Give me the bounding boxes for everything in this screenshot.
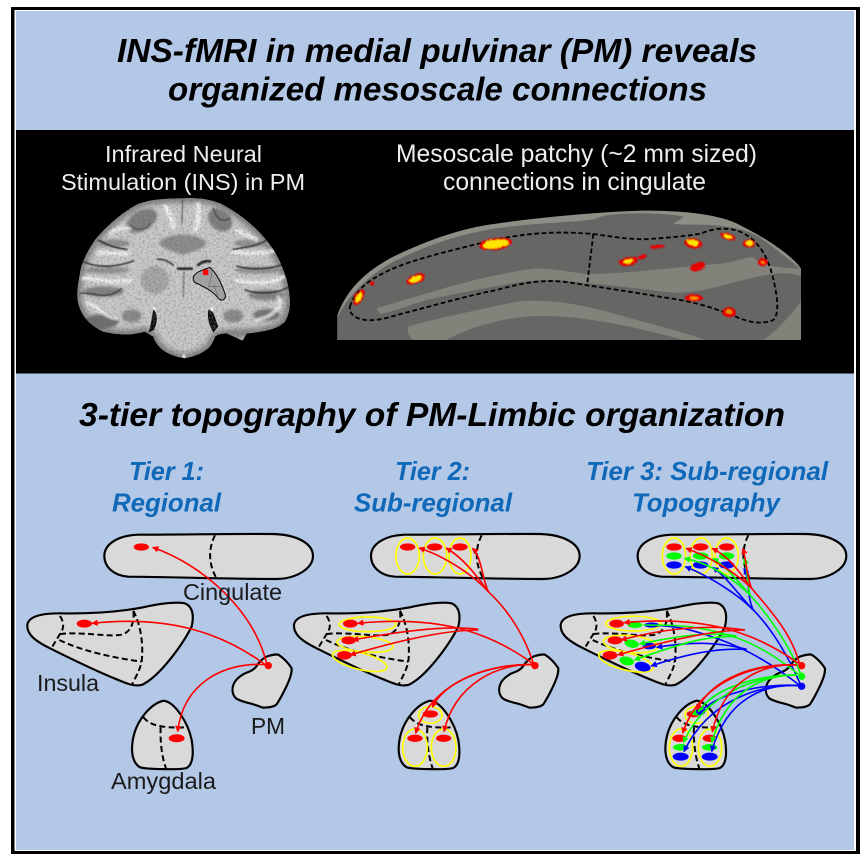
heading: mesoscale connections: Mesoscale patchy (~2 mm sized) (396, 141, 757, 168)
title: organized mesoscale connections (168, 72, 707, 108)
region: PM (766, 654, 825, 708)
heading: tier 2: Sub-regional (354, 490, 513, 518)
region: PM (233, 654, 292, 708)
diagram: tier 2 sub-regional (294, 534, 580, 769)
title: INS-fMRI in medial pulvinar (PM) reveals (117, 33, 757, 70)
heading: infrared neural stimulation (61, 141, 305, 195)
region: amygdala (399, 701, 459, 769)
heading: tier 1 (112, 458, 222, 518)
heading: tier 1: Tier 1: (129, 458, 204, 486)
green arrows (634, 558, 801, 743)
red patches (603, 543, 805, 742)
cingulate surface map (337, 211, 801, 340)
heading: tier 1: Regional (112, 490, 222, 518)
heading: 3-tier topography: 3-tier topography of PM-Limbic organization (79, 397, 785, 434)
pulvinar outline and stimulation site (193, 267, 225, 300)
label: Amygdala: Amygdala (111, 768, 217, 794)
diagram: tier 3 sub-regional topography (561, 534, 846, 769)
region: amygdala (665, 701, 726, 769)
region: amygdala (132, 701, 193, 769)
green patches (619, 552, 805, 751)
red target patches and PM site (77, 543, 272, 742)
title (117, 33, 757, 108)
label: Cingulate: Cingulate (183, 579, 282, 605)
region: cingulate (638, 534, 846, 579)
activation patches (350, 231, 767, 317)
region: cingulate (371, 534, 580, 579)
region: insula (27, 603, 193, 685)
yellow sub-regions (330, 538, 471, 766)
region: cingulate (104, 534, 313, 579)
label: PM: PM (251, 713, 285, 739)
region: PM (499, 654, 558, 708)
blue patches (634, 561, 805, 761)
heading: tier 2: Tier 2: (395, 458, 470, 486)
heading: tier 3 (586, 458, 829, 518)
heading: infrared neural stimulation: Stimulation (INS) in PM (61, 169, 305, 195)
heading: tier 3: Tier 3: Sub-regional (586, 458, 829, 486)
diagram: tier 1 regional (27, 534, 313, 769)
label: Insula: Insula (37, 670, 100, 696)
region: insula (561, 603, 726, 685)
yellow sub-regions (597, 538, 738, 766)
heading: tier 2 (354, 458, 513, 518)
arrows from PM (92, 547, 267, 732)
arrows from PM (350, 548, 533, 733)
blue arrows (645, 567, 801, 752)
panel: imaging (16, 130, 854, 374)
heading: infrared neural stimulation: Infrared Neural (105, 141, 262, 167)
heading: tier 3: Topography (632, 490, 782, 518)
heading: mesoscale connections: connections in cingulate (443, 169, 706, 196)
coronal brain MRI (77, 198, 290, 358)
heading: mesoscale connections (396, 141, 757, 196)
red target patches and PM site (337, 543, 539, 742)
region: insula (294, 603, 459, 685)
red arrows (618, 548, 799, 733)
